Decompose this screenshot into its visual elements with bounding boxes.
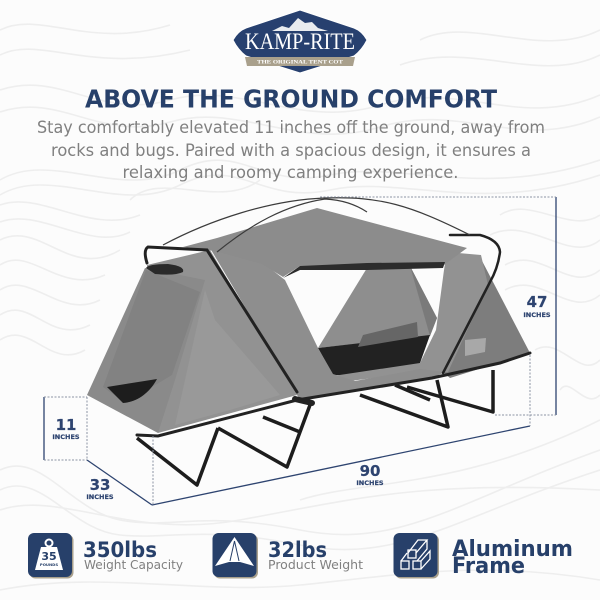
dimension label: 33 inches: 33 <box>90 476 110 494</box>
mattress <box>318 335 430 377</box>
frame <box>137 235 530 436</box>
roof valance <box>283 262 445 278</box>
stat: product weight: 32lbs <box>268 538 327 562</box>
dimension label: 90 inches <box>356 462 384 487</box>
icon: weight: POUNDS <box>40 562 58 567</box>
stat: aluminum frame: Frame <box>452 554 525 579</box>
inner tent wall <box>318 266 437 348</box>
left window fabric <box>103 270 200 403</box>
left end panel <box>87 268 205 433</box>
description: relaxing and roomy camping experience. <box>122 163 458 183</box>
main front panel <box>147 250 297 433</box>
back pillow <box>358 322 418 347</box>
fabric right of the front frame <box>210 248 445 399</box>
dimension label: 11 inches: 11 <box>56 416 76 434</box>
logo wordmark: KAMP-RITE <box>245 29 355 54</box>
dimension label: 90 inches: 90 <box>360 462 380 480</box>
dimension label: 11 inches <box>52 416 80 441</box>
icon: weight: 35 <box>41 550 57 563</box>
dimension label: 47 inches: 47 <box>527 293 547 311</box>
logo mountains <box>272 18 328 31</box>
logo ribbon <box>245 57 355 66</box>
dimension guides <box>44 197 556 505</box>
far end panel <box>440 257 530 378</box>
top arc poles <box>163 198 470 252</box>
stat: aluminum frame <box>452 537 573 579</box>
logo tag on tent <box>465 338 486 356</box>
icon: weight <box>28 533 74 578</box>
stat: weight capacity: 350lbs <box>83 538 157 562</box>
description <box>37 118 545 183</box>
dimension label: 11 inches: INCHES <box>52 433 80 441</box>
logo <box>233 10 367 73</box>
legs <box>137 370 493 485</box>
logo tagline: THE ORIGINAL TENT COT <box>257 60 343 66</box>
stat: product weight <box>268 538 363 572</box>
stat: weight capacity <box>83 538 183 572</box>
dimension lines <box>44 197 556 505</box>
dimension label: 47 inches: INCHES <box>523 311 551 319</box>
handle pad <box>146 264 183 275</box>
inner dark panel <box>410 266 437 336</box>
stat: aluminum frame: Aluminum <box>452 537 573 562</box>
left window mat <box>107 379 157 403</box>
panel highlight <box>175 290 280 425</box>
dimension label: 90 inches: INCHES <box>356 479 384 487</box>
description: Stay comfortably elevated 11 inches off the ground, away from <box>37 118 545 138</box>
roof <box>183 208 467 277</box>
icon: tent <box>212 533 258 578</box>
stat: product weight: Product Weight <box>268 558 363 572</box>
right door flap <box>333 252 488 381</box>
dimension label: 47 inches <box>523 293 551 319</box>
dimension label: 33 inches <box>86 476 114 501</box>
dimension label: 33 inches: INCHES <box>86 493 114 501</box>
icon: aluminum tubes <box>394 533 439 578</box>
title: ABOVE THE GROUND COMFORT <box>85 84 497 114</box>
description: rocks and bugs. Paired with a spacious design, it ensures a <box>51 141 531 161</box>
stat: weight capacity: Weight Capacity <box>84 558 183 572</box>
tent cot illustration <box>87 198 530 485</box>
